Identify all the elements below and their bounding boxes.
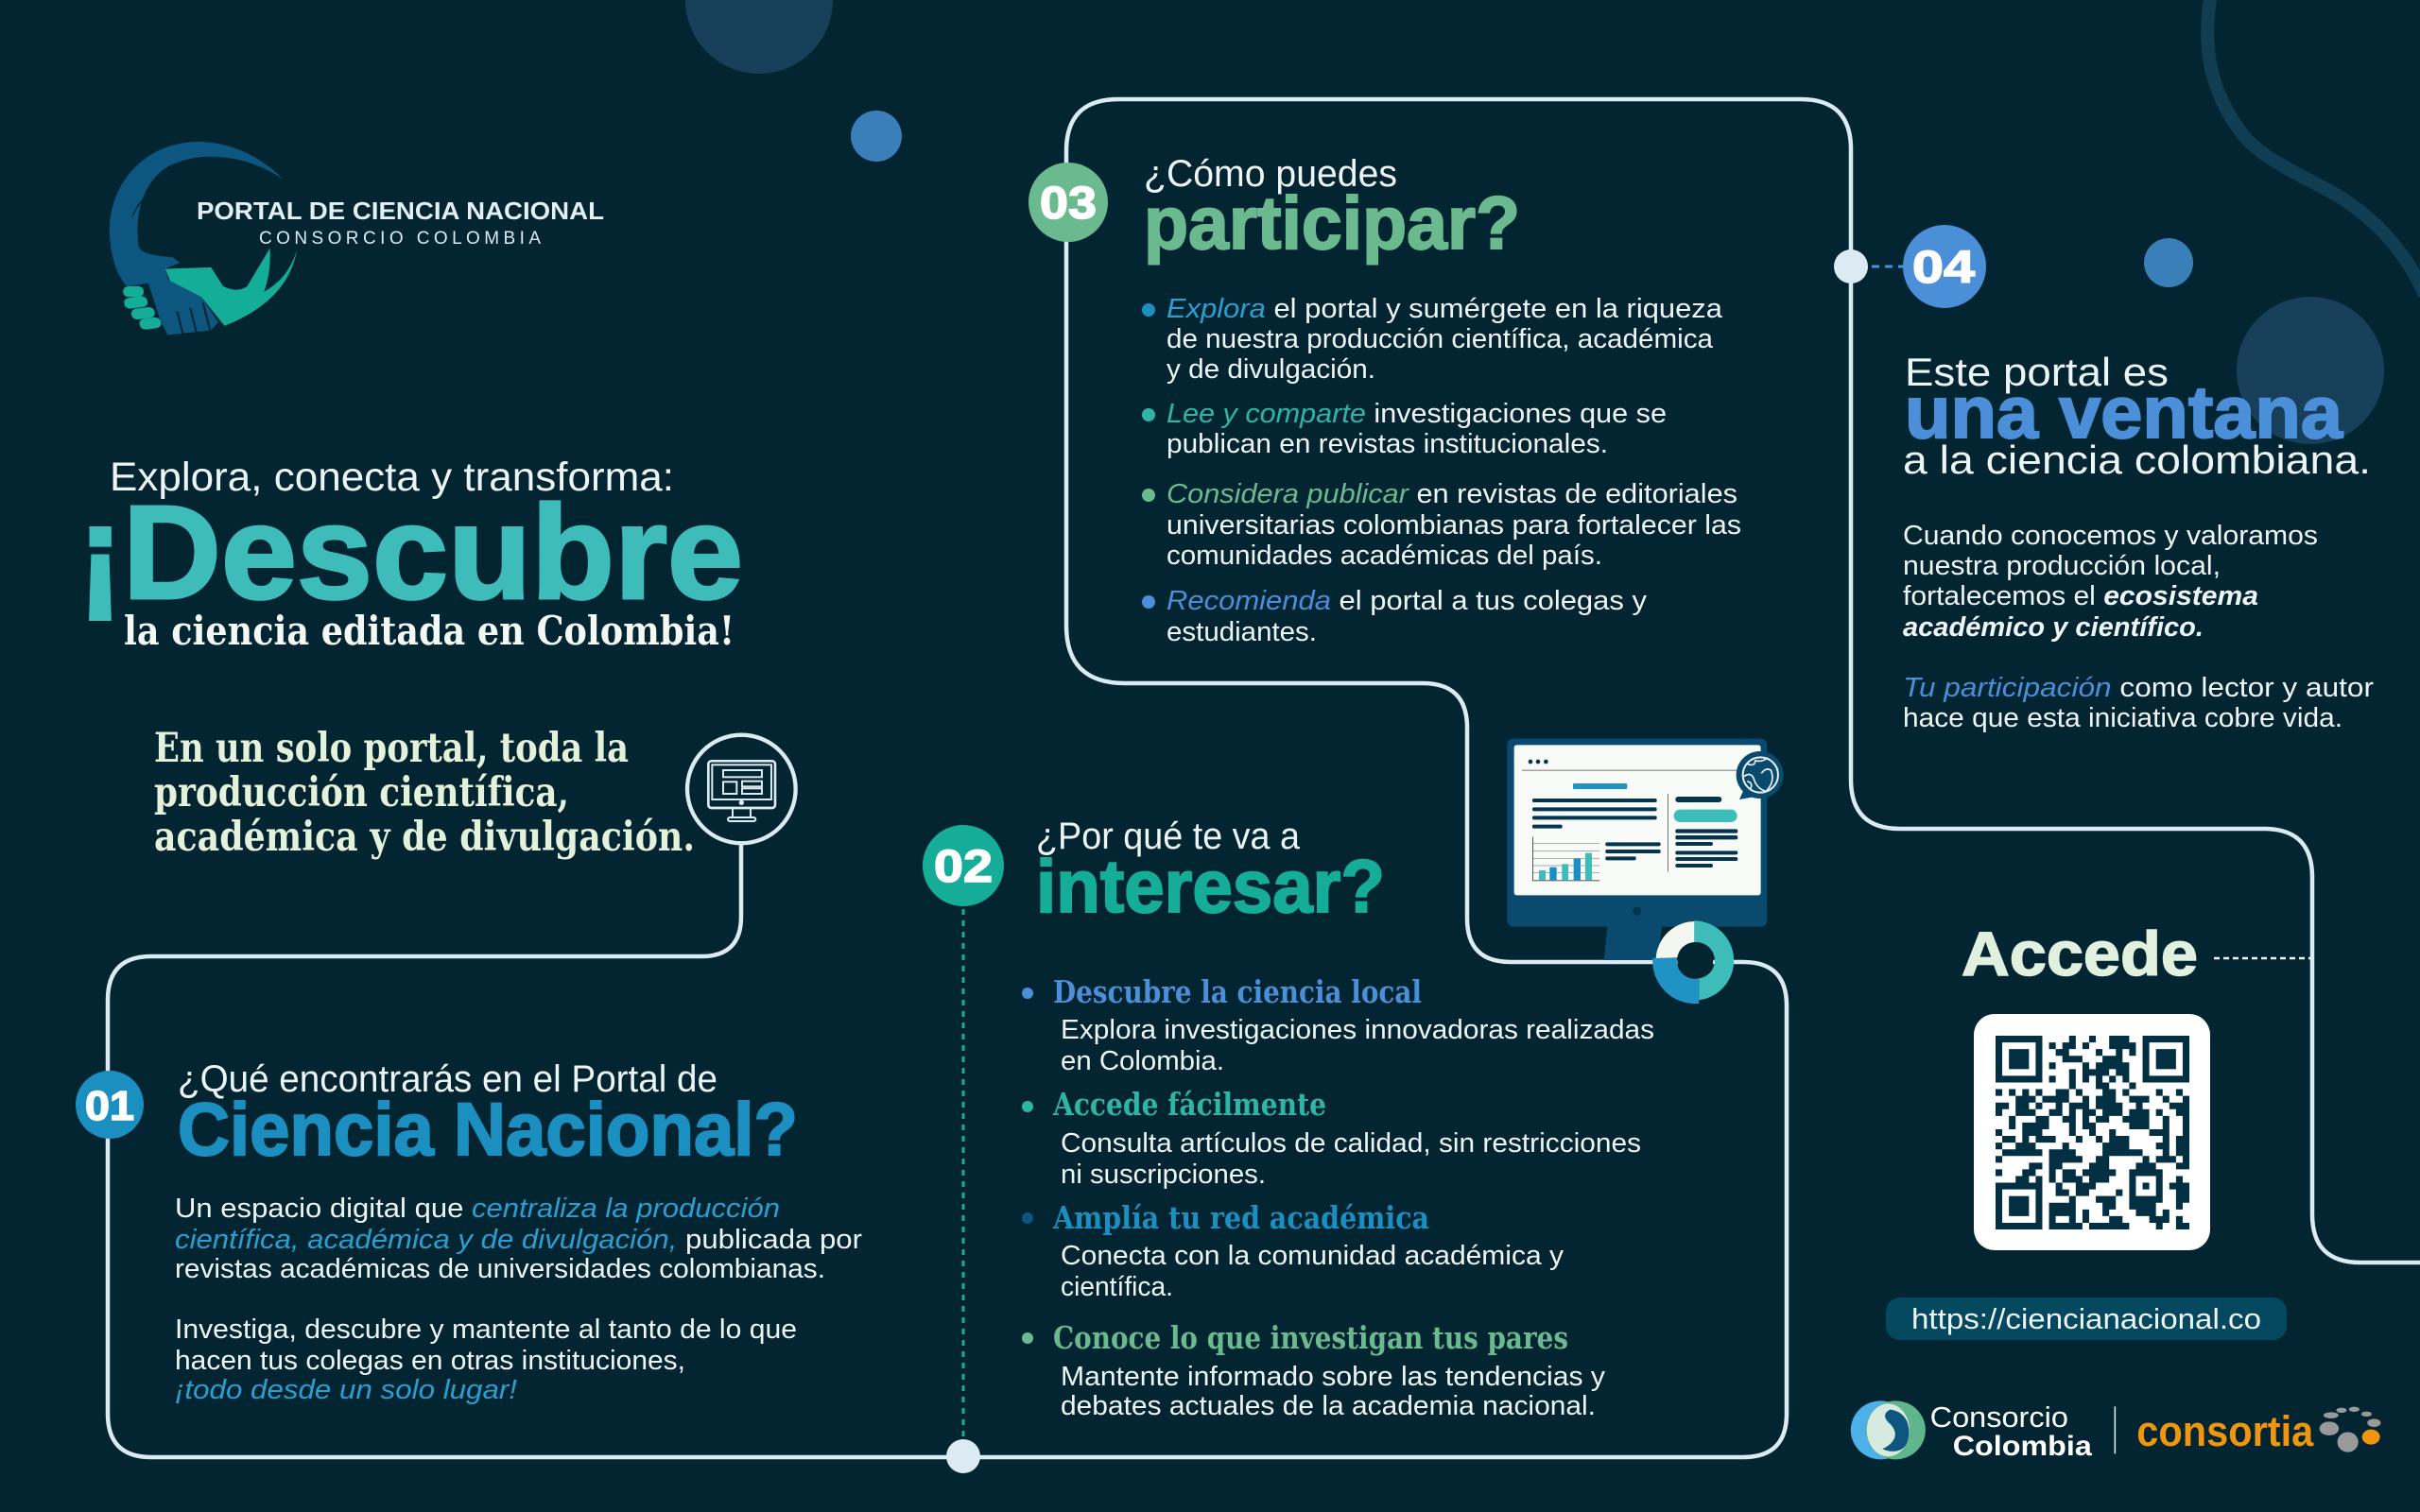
heading 04	[1903, 350, 2371, 482]
chart: donut	[1652, 920, 1734, 1004]
logo: Portal de Ciencia Nacional: CONSORCIO COLOMBIA	[259, 229, 541, 249]
illustration: monitor with donut	[1507, 739, 1784, 960]
heading 04: una ventana	[1905, 370, 2343, 454]
heading 04: a la ciencia colombiana.	[1903, 438, 2371, 482]
text block 04: académico y científico.	[1903, 612, 2204, 643]
heading 01: ¿Qué encontrarás en el Portal de	[178, 1058, 717, 1100]
dashed connector	[962, 898, 964, 1441]
badge 01: 01	[85, 1083, 134, 1129]
text block 04: nuestra producción local,	[1903, 551, 2221, 581]
panel: section 03	[1028, 153, 1741, 647]
intro statement: producción científica,	[154, 769, 569, 816]
item: Amplía tu red académica	[1022, 1199, 1564, 1302]
heading 02: interesar?	[1036, 844, 1385, 928]
heading 04: Este portal es	[1905, 350, 2169, 394]
text block 01: revistas académicas de universidades colombianas.	[175, 1254, 825, 1284]
intro statement	[154, 725, 695, 861]
item: Amplía tu red académica: Conecta con la comunidad académica y	[1061, 1241, 1564, 1271]
bullet: Recomienda: estudiantes.	[1167, 617, 1317, 647]
heading: subtitle: la ciencia editada en Colombia!	[124, 608, 735, 654]
heading 03: ¿Cómo puedes	[1144, 153, 1397, 195]
logos: Consorcio Colombia and consortia: Consorcio	[1930, 1402, 2068, 1434]
item: Conoce lo que investigan tus pares: Conoce lo que investigan tus pares	[1053, 1319, 1568, 1356]
heading: kicker: Explora, conecta y transforma:	[110, 455, 674, 500]
text block 04: hace que esta iniciativa cobre vida.	[1903, 703, 2342, 733]
text block 01: científica, académica y de divulgación, publicada por	[175, 1225, 862, 1255]
bullet: Explora: y de divulgación.	[1167, 354, 1375, 385]
bullet: Recomienda: Recomienda el portal a tus colegas y	[1167, 586, 1648, 616]
text block 04	[1903, 521, 2374, 733]
heading: Accede: Accede	[1962, 919, 2198, 988]
heading: Descubre: ¡Descubre	[78, 477, 743, 627]
item: Accede fácilmente: ni suscripciones.	[1061, 1160, 1266, 1190]
panel: section 01	[76, 1058, 862, 1405]
item: Descubre la ciencia local: Descubre la ciencia local	[1053, 973, 1422, 1010]
logo: Portal de Ciencia Nacional	[110, 142, 604, 335]
main heading	[78, 455, 743, 654]
text block 04: fortalecemos el ecosistema	[1903, 581, 2258, 611]
dashed connector	[1872, 265, 1904, 268]
badge 02	[923, 825, 1004, 906]
item: Descubre la ciencia local: en Colombia.	[1061, 1046, 1224, 1076]
bullet: Considera publicar	[1142, 479, 1741, 571]
icon: monitor in circle	[687, 735, 796, 843]
logo text: PORTAL DE CIENCIA NACIONAL	[197, 197, 604, 225]
intro statement: académica y de divulgación.	[154, 814, 695, 861]
heading 03: participar?	[1144, 180, 1520, 265]
URL pill	[1886, 1297, 2287, 1340]
icon: Consorcio Colombia mark	[1851, 1400, 1926, 1459]
bullet: Recomienda	[1142, 586, 1648, 647]
logos: Consorcio Colombia and consortia: consortia	[2136, 1408, 2314, 1455]
text block 04: Cuando conocemos y valoramos	[1903, 521, 2318, 551]
item: Descubre la ciencia local: Explora investigaciones innovadoras realizadas	[1061, 1015, 1654, 1045]
badge 04: 04	[1912, 243, 1975, 293]
item: Accede fácilmente: Accede fácilmente	[1052, 1086, 1326, 1123]
badge 02: 02	[934, 842, 993, 892]
text block 01: ¡todo desde un solo lugar!	[175, 1375, 517, 1405]
icon: consortia dots	[2320, 1407, 2380, 1452]
text block 04: Tu participación como lector y autor	[1903, 673, 2374, 703]
icon: globe bubble	[1737, 751, 1784, 799]
bullet: Explora: de nuestra producción científica, académica	[1167, 324, 1714, 354]
dashed line	[2214, 957, 2312, 959]
heading 02: ¿Por qué te va a	[1036, 816, 1301, 857]
heading 01: Ciencia Nacional?	[178, 1087, 798, 1171]
item: Accede fácilmente: Consulta artículos de calidad, sin restricciones	[1061, 1128, 1641, 1159]
bullet: Lee y comparte	[1142, 399, 1667, 459]
item: Amplía tu red académica: científica.	[1061, 1272, 1173, 1302]
logos: Consorcio Colombia and consortia: Colombia	[1953, 1430, 2093, 1461]
item: Amplía tu red académica: Amplía tu red académica	[1052, 1199, 1429, 1236]
URL pill: https://ciencianacional.co	[1911, 1302, 2261, 1335]
badge 04	[1903, 225, 1986, 308]
bullet: Lee y comparte: Lee y comparte investigaciones que se	[1167, 399, 1667, 429]
panel: access	[1851, 919, 2380, 1461]
QR code	[1974, 1014, 2210, 1250]
decorative background circles	[685, 0, 2420, 444]
intro statement: En un solo portal, toda la	[154, 725, 629, 772]
text block 01: Investiga, descubre y mantente al tanto de lo que	[175, 1314, 797, 1345]
bullet: Considera publicar: Considera publicar en revistas de editoriales	[1167, 479, 1737, 509]
item: Accede fácilmente	[1022, 1086, 1641, 1190]
icon: handshake crescent	[110, 142, 297, 335]
item: Conoce lo que investigan tus pares: debates actuales de la academia nacional.	[1061, 1391, 1596, 1421]
badge 03	[1028, 163, 1108, 242]
item: Descubre la ciencia local	[1022, 973, 1654, 1076]
badge 01	[76, 1071, 144, 1139]
bullet: Explora	[1142, 294, 1723, 385]
logos: Consorcio Colombia and consortia	[1851, 1400, 2380, 1461]
node on line	[1834, 249, 1868, 284]
node bottom	[946, 1439, 980, 1473]
item: Conoce lo que investigan tus pares: Mantente informado sobre las tendencias y	[1061, 1362, 1606, 1392]
text block 01: hacen tus colegas en otras instituciones,	[175, 1346, 685, 1376]
panel: section 04	[1834, 225, 2374, 733]
bullet: Lee y comparte: publican en revistas institucionales.	[1167, 429, 1608, 459]
bullet: Explora: Explora el portal y sumérgete en la riqueza	[1167, 294, 1723, 324]
badge 03: 03	[1040, 179, 1097, 229]
bullet: Considera publicar: comunidades académicas del país.	[1167, 541, 1602, 571]
bullet: Considera publicar: universitarias colombianas para fortalecer las	[1167, 510, 1741, 541]
panel: section 02	[923, 816, 1654, 1473]
text block 01: Un espacio digital que centraliza la producción	[175, 1194, 780, 1224]
item: Conoce lo que investigan tus pares	[1022, 1319, 1606, 1421]
text block 01	[175, 1194, 862, 1405]
